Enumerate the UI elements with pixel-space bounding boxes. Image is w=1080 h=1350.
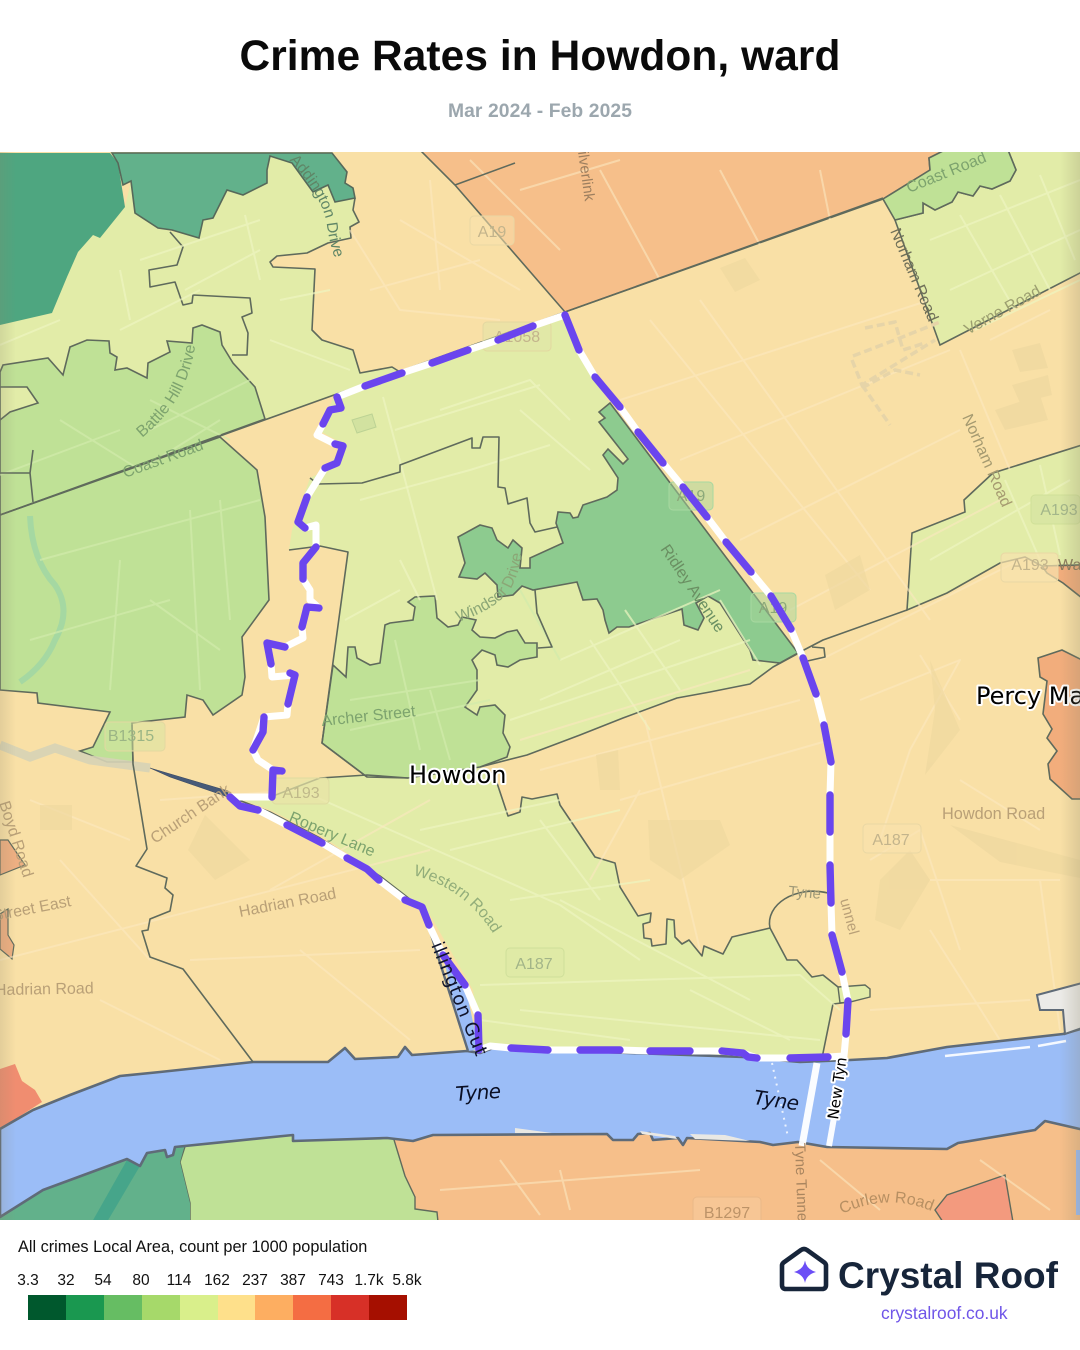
- sign: A193 lower east: A193: [1011, 557, 1049, 574]
- region: south low crime: [180, 1136, 438, 1220]
- label: Howdon Road: Howdon Road: [942, 805, 1045, 823]
- region: band boundary lines: [480, 654, 838, 987]
- region: west of Coast Road: [0, 437, 269, 762]
- beach: river shore patches: [515, 1128, 750, 1141]
- region: Archer Street low crime: [322, 596, 537, 778]
- subtitle: date range: Mar 2024 - Feb 2025: [448, 101, 632, 122]
- region: top orange high crime: [420, 150, 945, 312]
- sign: A1058: [483, 322, 551, 351]
- sign: A193 west: [272, 778, 329, 804]
- boundary lines: internal ward divisions: [0, 163, 907, 1062]
- stream: grey canal: [0, 745, 150, 768]
- road bridge: Tyne tunnel approach: [802, 1063, 817, 1146]
- label: Coast Road east: Coast Road: [904, 149, 989, 197]
- sign: B1315: B1315: [108, 728, 154, 745]
- region: Ridley Avenue lowest crime in ward: [458, 403, 798, 663]
- label: Tyne Tunnel upper: Tyne: [788, 883, 822, 903]
- logo: Crystal Roof: [780, 1246, 1058, 1323]
- legend values: 114: [167, 1272, 191, 1289]
- jetties: north bank: [945, 1041, 1066, 1056]
- sign: B1297: [693, 1197, 761, 1226]
- sign: A19 upper ward: A19: [677, 488, 705, 505]
- title: Crime Rates in Howdon, ward: [240, 32, 840, 79]
- sign: A19 north: A19: [478, 224, 506, 241]
- label: Tyne Tunnel upper: [788, 883, 862, 936]
- label: Norham Road north: Norham Road: [886, 226, 941, 324]
- river: Willington Gut inlet: [444, 964, 476, 1051]
- river: Willington Gut bank: [428, 925, 468, 1051]
- region: north-west low crime area: [0, 157, 396, 418]
- legend values: 1.7k: [354, 1272, 384, 1289]
- legend values: [17, 1272, 422, 1289]
- legend values: 3.3: [17, 1272, 39, 1289]
- edge fade left: [0, 152, 16, 1220]
- sign: A187 ward: [506, 948, 564, 977]
- ward boundary: white underlay: [228, 315, 848, 1058]
- river Tyne: [0, 1028, 1080, 1217]
- region: south-west very low crime: [0, 1147, 190, 1220]
- sliver: dark waterway at Church Bank: [150, 768, 228, 797]
- legend values: 743: [318, 1272, 344, 1289]
- buildings: darker ground patches: [40, 562, 948, 878]
- label: Tyne river west: Tyne: [455, 1079, 501, 1106]
- label: Tyne river east: Tyne: [752, 1085, 800, 1115]
- label: Curlew Road: Curlew Road: [840, 1192, 934, 1212]
- sign: A19 lower ward: A19: [759, 600, 787, 617]
- region: Coast Road north-east: [883, 150, 1016, 220]
- label: Church Bank: Church Bank: [148, 781, 235, 847]
- sign: A19 lower ward: [751, 593, 796, 622]
- legend values: 387: [280, 1272, 306, 1289]
- region: south high crime: [395, 1122, 1080, 1220]
- sign: A187 east: [863, 824, 921, 853]
- road: dotted ferry path: [772, 1063, 788, 1137]
- river: east sliver: [1076, 1150, 1080, 1215]
- icon: house with star: [780, 1246, 828, 1292]
- legend values: 80: [132, 1272, 150, 1289]
- region: far north-west very low crime: [0, 153, 125, 325]
- sign: A19 upper ward: [669, 482, 713, 510]
- stream: west pond: [20, 516, 64, 682]
- sign: A193 lower east: [1001, 553, 1058, 582]
- rail line: disused sidings: [852, 322, 940, 425]
- legend values: 162: [204, 1272, 230, 1289]
- region: south-west red: [0, 1064, 42, 1129]
- label: Battle Hill Drive: Battle Hill Drive: [136, 345, 195, 437]
- label: Tyne Tunnel upper: unnel: [836, 897, 862, 936]
- region: NW inner boundary: [149, 232, 252, 355]
- sign: A193 east: A193: [1040, 502, 1078, 519]
- wordmark: Crystal Roof: [838, 1255, 1058, 1296]
- region: east small orange: [1042, 565, 1080, 598]
- streets: minor road network: [0, 160, 1080, 1215]
- road: south-west teal strip: [92, 1160, 140, 1222]
- region: orange wedge at tunnel mouth line: [822, 1002, 844, 1054]
- sign: A193 west: A193: [282, 785, 320, 802]
- region: small green tab east of tunnel: [838, 985, 870, 1003]
- region: Howdon centre band moderate crime: [480, 640, 862, 987]
- map base: moderate crime area: [0, 152, 1080, 1220]
- dock: grey quay: [1037, 983, 1080, 1034]
- website link: crystalroof.co.uk: [881, 1303, 1008, 1323]
- label: Ropery Lane: Ropery Lane: [286, 809, 378, 861]
- label: Western Road: Western Road: [416, 864, 502, 933]
- label: Hadrian Road east: Hadrian Road: [238, 885, 338, 921]
- map of Howdon ward: [0, 152, 1080, 1220]
- label: Willington Gut: illington Gut: [426, 939, 491, 1059]
- region: north very low crime: [112, 153, 355, 238]
- legend values: 32: [57, 1272, 75, 1289]
- region: north-east low crime: [895, 150, 1080, 345]
- region: west edge patches: [0, 840, 25, 959]
- ward boundary: purple dashes: [230, 315, 848, 1058]
- legend values: 54: [94, 1272, 112, 1289]
- label: Norham Road south: Norham Road: [958, 412, 1014, 510]
- sign: A187 east: A187: [872, 832, 910, 849]
- label: Ridley Avenue: Ridley Avenue: [657, 542, 728, 636]
- region: south-east red: [935, 1175, 1013, 1222]
- region: Battle Hill: [0, 325, 265, 515]
- legend values: 5.8k: [392, 1272, 422, 1289]
- region: east low crime: [907, 445, 1080, 610]
- sign: A1058: A1058: [494, 329, 540, 346]
- sign: A193 east: [1031, 495, 1080, 524]
- label: Silverlink: ilverlink: [574, 150, 598, 203]
- legend values: 237: [242, 1272, 268, 1289]
- edge fade right: [1060, 152, 1080, 1220]
- label: Coast Road west: Coast Road: [121, 437, 206, 482]
- label: New Tyne Tunnel: New Tyn: [824, 1056, 851, 1121]
- legend title: All crimes Local Area, count per 1000 population: [18, 1238, 367, 1256]
- sign: A19 north: [470, 216, 514, 245]
- label: Windsor Drive: Windsor Drive: [454, 554, 522, 621]
- label: Archer Street: Archer Street: [321, 703, 417, 730]
- region: Percy Main higher crime: [1038, 650, 1080, 799]
- region: Howdon ward low crime: [228, 312, 850, 1062]
- buildings: small green sports court: [352, 414, 376, 433]
- sign: A187 ward: A187: [515, 956, 553, 973]
- road bridge: New Tyne Tunnel: [829, 1112, 835, 1146]
- region: NW boundary line: [270, 198, 400, 373]
- label: Verne Road: Verne Road: [962, 283, 1044, 338]
- legend colour scale: [28, 1295, 407, 1320]
- region: Battle Hill west pocket: [0, 387, 38, 420]
- legend: [17, 1238, 422, 1320]
- sign: B1315: [105, 722, 165, 751]
- label: Howdon place name: Howdon: [409, 761, 506, 789]
- label: Addington Drive: Addington Drive: [290, 156, 342, 257]
